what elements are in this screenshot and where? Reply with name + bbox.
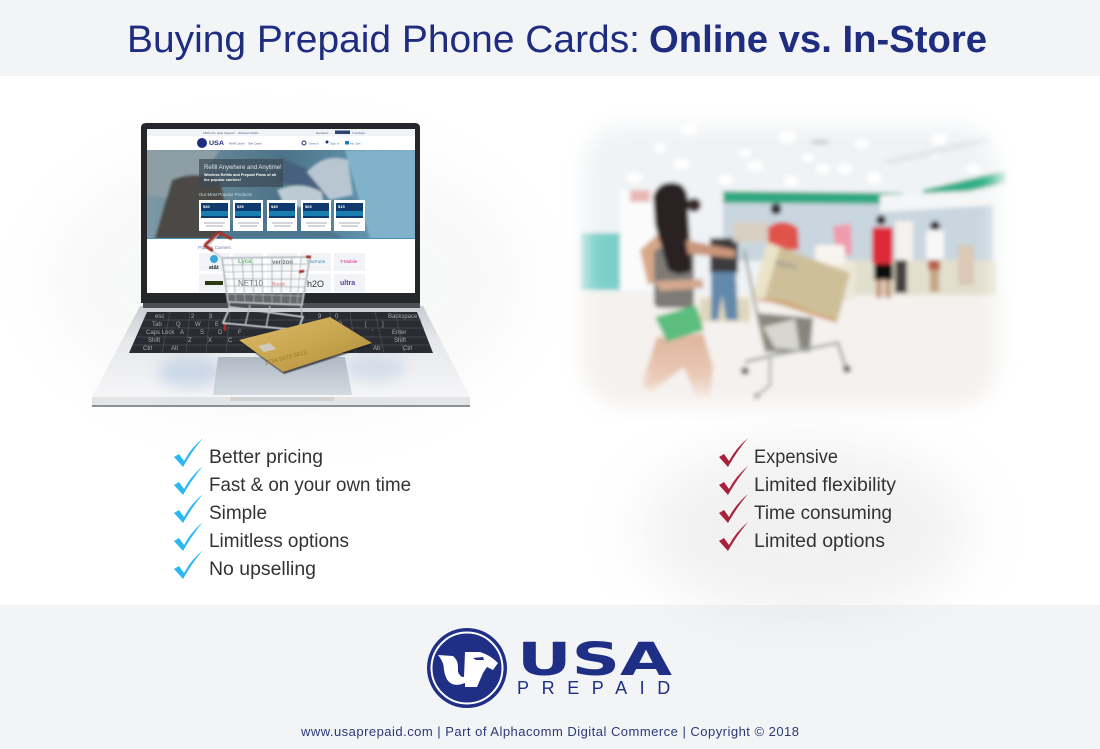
carrier logos <box>198 245 365 292</box>
laptop keyboard: E <box>215 322 219 328</box>
site logo <box>197 138 361 148</box>
laptop keyboard: esc <box>155 314 164 320</box>
hero caption: the popular carriers! <box>204 178 241 182</box>
shopper in foreground <box>640 182 735 402</box>
shopper in jeans <box>710 222 768 320</box>
icon: eagle roundel <box>427 628 507 708</box>
shoppers right <box>815 215 974 298</box>
product cards: $65 <box>305 204 312 209</box>
laptop keyboard: 3 <box>209 314 213 320</box>
laptop keyboard: ] <box>382 322 384 328</box>
header band: Online vs. In-Store <box>649 19 987 61</box>
wordmark Prepaid: PREPAID <box>517 678 683 698</box>
check item: Time consuming <box>719 494 892 524</box>
laptop keyboard: Tab <box>152 322 162 328</box>
product cards: $30 <box>203 204 210 209</box>
check item: No upselling <box>174 550 316 580</box>
shopping cart with box: HDTV <box>774 258 798 273</box>
list: in-store drawbacks <box>719 438 897 552</box>
site logo: USA <box>209 141 225 147</box>
shopping cart with box <box>741 242 851 400</box>
check item: Better pricing: Better pricing <box>209 447 323 468</box>
carrier logos: at&t <box>209 265 219 271</box>
hero caption <box>199 159 283 197</box>
logo: USA Prepaid <box>427 628 683 708</box>
carrier logos: TracFone <box>306 259 326 264</box>
laptop keyboard: Shift <box>394 338 406 344</box>
laptop keyboard: 9 <box>318 314 322 320</box>
laptop keyboard: A <box>180 330 184 336</box>
check item: Fast and on your own time <box>174 466 411 496</box>
laptop screen bezel <box>141 123 420 303</box>
wordmark USA: USA <box>517 633 672 686</box>
hero photo <box>147 150 415 239</box>
check item: Limitless options <box>174 522 349 552</box>
carrier logos: verizon <box>272 260 293 266</box>
check item: Better pricing <box>174 438 323 468</box>
site logo: Sell Cards <box>248 142 262 146</box>
check item: Limited flexibility <box>719 466 897 496</box>
website screen: TrustSpot <box>352 131 365 135</box>
laptop keyboard: W <box>195 322 201 328</box>
site logo: My Cart <box>350 142 361 146</box>
carrier logos: Boost <box>272 282 285 288</box>
check item: Limitless options: Limitless options <box>209 531 349 552</box>
hero caption: Refill Anywhere and Anytime! <box>204 165 282 171</box>
check item: No upselling: No upselling <box>209 559 316 580</box>
site logo: Sign in <box>330 142 340 146</box>
laptop keyboard: ' <box>372 330 373 336</box>
soft shadow behind right list <box>640 442 970 618</box>
check item: Limited options: Limited options <box>754 531 885 552</box>
laptop keyboard: D <box>218 330 223 336</box>
laptop keyboard: 2 <box>191 314 195 320</box>
laptop keyboard: Caps Lock <box>146 330 175 336</box>
check item: Expensive <box>719 438 838 468</box>
carrier logos: Lyca <box>238 259 252 265</box>
site logo: Refill Cards <box>229 142 245 146</box>
hero caption: Our Most Popular Products <box>199 192 253 197</box>
site logo: Search <box>309 142 319 146</box>
shopping cart <box>204 232 311 338</box>
laptop keyboard: F <box>238 330 242 336</box>
laptop trackpad <box>213 357 352 395</box>
shopper in red at counter <box>767 204 799 250</box>
check item: Expensive: Expensive <box>754 447 838 468</box>
laptop keyboard: Shift <box>148 338 160 344</box>
laptop keyboard: Backspace <box>388 314 418 320</box>
website screen: Help Support <box>217 131 235 135</box>
credit card <box>239 317 373 374</box>
credit card: 1234 5678 9012 <box>264 350 308 367</box>
carrier logos: ultra <box>340 280 355 287</box>
laptop keyboard <box>129 312 433 353</box>
laptop keyboard: C <box>228 338 233 344</box>
carrier logos: h2O <box>307 279 324 289</box>
header band <box>0 0 1100 76</box>
laptop keyboard: P <box>338 322 342 328</box>
check item: Simple <box>174 494 267 524</box>
laptop keyboard: Z <box>188 338 192 344</box>
check item: Limited flexibility: Limited flexibility <box>754 475 897 496</box>
soft shadow behind laptop <box>45 140 525 420</box>
laptop keyboard: Ctrl <box>403 346 412 352</box>
product cards: $15 <box>338 204 345 209</box>
laptop keyboard: Enter <box>392 330 406 336</box>
laptop keyboard: 0 <box>335 314 339 320</box>
hero caption: Wireless Refills and Prepaid Plans of all <box>204 173 276 177</box>
footer band <box>0 605 1100 749</box>
laptop keyboard: S <box>200 330 204 336</box>
laptop keyboard: X <box>208 338 212 344</box>
list: online benefits <box>174 438 411 580</box>
panel: in-store photo <box>578 126 1008 406</box>
website screen <box>147 129 415 293</box>
website screen: Excellent <box>316 131 328 135</box>
carrier logos: Popular Carriers <box>198 245 232 250</box>
check item: Fast and on your own time: Fast & on your own time <box>209 475 411 496</box>
laptop keyboard: Alt <box>171 346 178 352</box>
panel: online laptop illustration <box>92 123 470 407</box>
laptop keyboard: Alt <box>373 346 380 352</box>
title: Buying Prepaid Phone Cards: <box>127 19 640 61</box>
laptop keyboard: Ctrl <box>143 346 152 352</box>
laptop hinge <box>143 303 420 308</box>
website screen: 1800 Info <box>203 131 216 135</box>
laptop keyboard: Q <box>176 322 181 328</box>
product cards: $35 <box>237 204 244 209</box>
footer text: www.usaprepaid.com | Part of Alphacomm Digital Commerce | Copyright © 2018 <box>300 724 799 739</box>
website screen: Wireless Refills <box>238 131 259 135</box>
laptop keyboard: [ <box>365 322 367 328</box>
carrier logos: T-Mobile <box>340 259 358 264</box>
check item: Limited options <box>719 522 885 552</box>
carrier logos: NET10 <box>238 279 263 288</box>
check item: Time consuming: Time consuming <box>754 503 892 524</box>
check item: Simple: Simple <box>209 503 267 524</box>
product cards: $45 <box>271 204 278 209</box>
product cards <box>199 200 365 231</box>
laptop base <box>92 306 470 407</box>
